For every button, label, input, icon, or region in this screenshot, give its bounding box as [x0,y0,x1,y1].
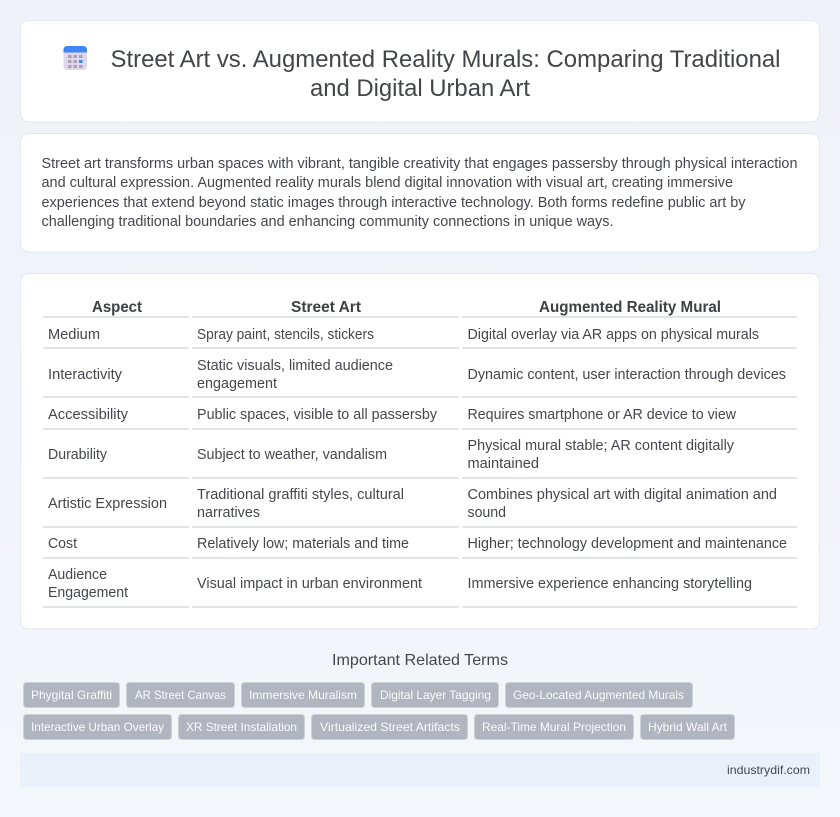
table row: Audience Engagement: Immersive experience enhancing storytelling [468,576,752,592]
table header row: Street Art [291,299,361,316]
panel: comparison table [20,274,820,629]
text block: introduction paragraph: experiences that extend beyond static images through interactive technology. Both forms redefine public art by [42,195,746,211]
panel: introduction [20,134,820,252]
table row: Interactivity: engagement [197,376,277,392]
table row: Interactivity: Interactivity [48,367,123,383]
table row: Medium [48,327,759,343]
tag [372,682,498,708]
tag: Interactive Urban Overlay [31,720,164,734]
table row: Artistic Expression [48,487,777,521]
table header row: Aspect [92,299,142,316]
tag: Hybrid Wall Art [648,720,728,734]
tag: Real-Time Mural Projection [482,720,626,734]
tag: Immersive Muralism [249,688,357,702]
table row: Artistic Expression: Artistic Expression [48,496,167,512]
table row: Audience Engagement [48,567,752,601]
table row: Accessibility: Public spaces, visible to all passersby [197,407,438,423]
table row: Accessibility [48,407,737,423]
heading: main title: Street Art vs. Augmented Reality Murals: Comparing Traditional [110,46,780,73]
table row: Accessibility: Requires smartphone or AR device to view [468,407,737,423]
icon: calendar [64,46,87,70]
table row: Medium: Digital overlay via AR apps on physical murals [468,327,759,343]
table row: Artistic Expression: sound [468,505,506,521]
table row: Cost [48,536,787,552]
tag: XR Street Installation [186,720,297,734]
table row: Durability [48,438,735,472]
table row: Artistic Expression: Traditional graffiti styles, cultural [197,487,404,503]
table row: Audience Engagement: Audience [48,567,107,583]
tag [24,714,172,740]
table row: Medium: Medium [48,327,100,343]
text block: introduction paragraph: and cultural expression. Augmented reality murals blend digital innovation with visual art, creating immersive [42,175,733,191]
text block: introduction paragraph [42,156,798,230]
tag [506,682,692,708]
tag [312,714,468,740]
table row: Interactivity [48,358,786,392]
table row: Artistic Expression: Combines physical art with digital animation and [468,487,777,503]
table row: Durability: Durability [48,447,108,463]
table row: Medium: Spray paint, stencils, stickers [197,327,374,343]
tag: Phygital Graffiti [31,688,112,702]
table row: Audience Engagement: Visual impact in urban environment [197,576,422,592]
table row: Durability: Physical mural stable; AR content digitally [468,438,735,454]
tag: AR Street Canvas [135,688,226,702]
tag [126,682,234,708]
table row: Cost: Cost [48,536,77,552]
table row: Cost: Relatively low; materials and time [197,536,409,552]
table row: Audience Engagement: Engagement [48,585,128,601]
table header row: Augmented Reality Mural [539,299,721,316]
tag [24,682,120,708]
tag [640,714,734,740]
table row: Durability: Subject to weather, vandalism [197,447,387,463]
footer source text: industrydif.com [727,763,810,777]
heading: main title: and Digital Urban Art [310,75,530,102]
panel: title header [20,20,820,122]
tag [178,714,304,740]
tag: Virtualized Street Artifacts [320,720,460,734]
heading: main title [110,46,780,102]
table row: Accessibility: Accessibility [48,407,129,423]
table row: Interactivity: Static visuals, limited audience [197,358,393,374]
footer bar [20,753,820,787]
table row: Durability: maintained [468,456,539,472]
tag [242,682,364,708]
tag: Geo-Located Augmented Murals [513,688,684,702]
table row: Interactivity: Dynamic content, user interaction through devices [468,367,786,383]
tag list: related terms [24,682,734,740]
text block: introduction paragraph: challenging traditional boundaries and enhancing community connections in unique ways. [42,214,614,230]
tag [474,714,634,740]
heading: important related terms: Important Related Terms [332,652,508,669]
table row: Artistic Expression: narratives [197,505,260,521]
text block: introduction paragraph: Street art transforms urban spaces with vibrant, tangible creativity that engages passersby through physical interaction [42,156,798,172]
tag: Digital Layer Tagging [380,688,491,702]
table row: Cost: Higher; technology development and maintenance [468,536,787,552]
table header row [92,299,721,316]
